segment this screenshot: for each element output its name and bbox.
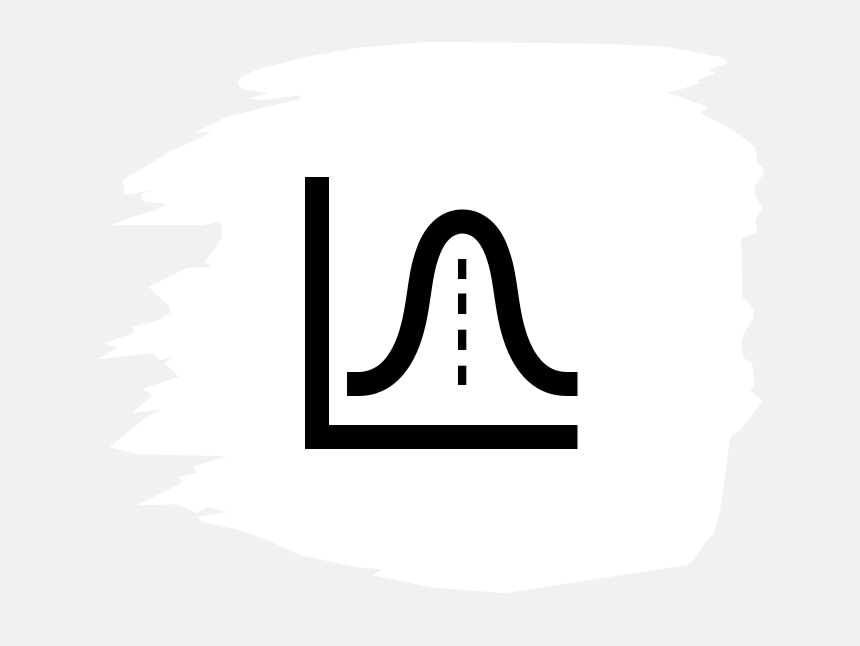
icon: bell curve chart bbox=[305, 177, 578, 449]
bell curve bbox=[347, 222, 578, 384]
y and x axes bbox=[305, 177, 578, 449]
white brush stroke background bbox=[98, 42, 764, 593]
dashed median line bbox=[458, 259, 466, 385]
